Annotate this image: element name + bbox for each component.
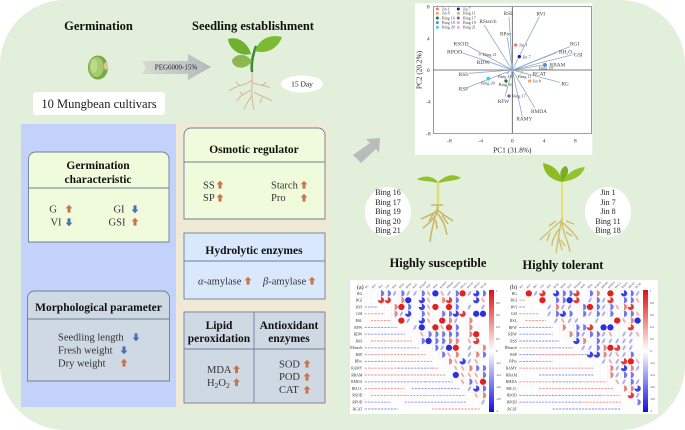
sample points: Bing 16 bbox=[499, 82, 513, 87]
sample points: Bing 21 bbox=[483, 52, 497, 57]
axes ticks: PC2 (20.2%) bbox=[415, 50, 424, 89]
card: Lipid peroxidation and Antioxidant enzymes: O bbox=[218, 378, 226, 389]
card: Lipid peroxidation and Antioxidant enzymes: MDA bbox=[207, 365, 232, 376]
card: Hydrolytic enzymes bbox=[184, 233, 325, 299]
chart: correlation matrix (b): 0.8 bbox=[650, 301, 654, 305]
axes ticks: 8 bbox=[427, 5, 430, 11]
card: Germination characteristic: G bbox=[49, 204, 57, 216]
vector labels: RH₂O₂ bbox=[559, 50, 574, 56]
card: Morphological parameter bbox=[28, 291, 170, 381]
vectors bbox=[461, 17, 572, 117]
callout: susceptible cultivars: Bing 17 bbox=[375, 198, 401, 207]
card: Lipid peroxidation and Antioxidant enzymes: 2 bbox=[226, 381, 230, 390]
card: Germination characteristic: VI bbox=[50, 218, 62, 228]
sample points: Jin 7 bbox=[522, 54, 531, 59]
card: Osmotic regulator: Starch bbox=[271, 180, 299, 192]
icon: susceptible seedling bbox=[418, 176, 460, 242]
card: Germination characteristic: GSI bbox=[109, 218, 126, 228]
legend: Jin 7 bbox=[463, 6, 471, 11]
card: Lipid peroxidation and Antioxidant enzymes: 2 bbox=[215, 381, 219, 390]
card: Osmotic regulator: Pro bbox=[271, 193, 286, 204]
chart: correlation matrix (b): 0.2 bbox=[650, 337, 654, 341]
vector labels: RSOD bbox=[453, 41, 468, 47]
vector labels: RDW bbox=[477, 60, 491, 66]
vector labels: RAMY bbox=[516, 117, 532, 123]
chart: correlation matrix (b) bbox=[505, 280, 658, 414]
axes ticks: -8 bbox=[447, 139, 452, 145]
chart: correlation matrix (a): 1 bbox=[496, 289, 498, 293]
sample points: Bing 17 bbox=[512, 94, 527, 99]
card: Lipid peroxidation and Antioxidant enzymes: CAT bbox=[279, 385, 299, 396]
sample points: Jin 8 bbox=[533, 79, 541, 84]
chart: correlation matrix (a): -0.2 bbox=[496, 361, 501, 365]
card: Lipid peroxidation and Antioxidant enzymes: SOD bbox=[279, 360, 300, 370]
panel: biochemical traits right column bbox=[176, 124, 330, 407]
label box: 10 Mungbean cultivars bbox=[33, 92, 165, 115]
heading: Germination: Germination bbox=[64, 19, 133, 33]
chart: correlation matrix (a): -0.8 bbox=[496, 397, 501, 401]
axes ticks bbox=[415, 5, 577, 154]
heading: Highly tolerant: Highly tolerant bbox=[523, 258, 604, 272]
chart: correlation matrix (a): -0.4 bbox=[496, 373, 501, 377]
panel: physiological traits left column bbox=[21, 124, 176, 407]
legend: Bing 21 bbox=[463, 25, 476, 30]
card: Germination characteristic: characteristic bbox=[64, 174, 132, 186]
card: Osmotic regulator: Osmotic regulator bbox=[209, 144, 299, 156]
vector labels: RCAT bbox=[533, 72, 547, 78]
legend: Bing 11 bbox=[463, 11, 476, 16]
callout: susceptible cultivars: Bing 21 bbox=[375, 226, 401, 235]
legend: Jin 1 bbox=[442, 6, 450, 11]
card: Lipid peroxidation and Antioxidant enzymes: POD bbox=[279, 372, 300, 383]
vector labels: RVI bbox=[536, 11, 545, 17]
arrow: PEG6000-15% bbox=[142, 54, 211, 80]
axes ticks: 4 bbox=[427, 36, 430, 42]
label box: 10 Mungbean cultivars: 10 Mungbean cultivars bbox=[41, 97, 157, 111]
legend: Bing 16 bbox=[442, 15, 455, 20]
card: Hydrolytic enzymes: β-amylase bbox=[262, 276, 306, 288]
card: Lipid peroxidation and Antioxidant enzymes: peroxidation bbox=[188, 333, 251, 345]
callout: susceptible cultivars bbox=[365, 187, 411, 237]
axes ticks: PC1 (31.8%) bbox=[493, 145, 532, 154]
chart: correlation matrix (a): -1 bbox=[496, 409, 499, 413]
chart: correlation matrix (b): 1 bbox=[650, 289, 652, 293]
legend: Bing 17 bbox=[463, 15, 476, 20]
heading: Seedling establishment: Seedling establishment bbox=[192, 19, 315, 33]
card: Lipid peroxidation and Antioxidant enzymes bbox=[184, 312, 325, 403]
card: Morphological parameter: Fresh weight bbox=[58, 346, 113, 356]
sample points: Bing 11 bbox=[518, 74, 532, 79]
chart: correlation matrix (a) bbox=[350, 280, 507, 414]
card: Osmotic regulator: SP bbox=[203, 193, 215, 204]
vector labels: RBAM bbox=[550, 62, 566, 68]
arrow: PEG6000-15%: PEG6000-15% bbox=[155, 64, 197, 72]
vector labels: RStarch bbox=[479, 19, 497, 25]
sample points: Jin 1 bbox=[519, 43, 527, 48]
sample points: Bing 18 bbox=[539, 66, 553, 71]
callout: susceptible cultivars: Bing 19 bbox=[375, 207, 401, 216]
chart: correlation matrix (a): 0 bbox=[496, 349, 498, 353]
chart: correlation matrix (b): 0.6 bbox=[650, 313, 654, 317]
chart: correlation matrix (b): 0 bbox=[650, 349, 652, 353]
axes ticks: -4 bbox=[478, 139, 483, 145]
callout: 15 Day: 15 Day bbox=[291, 80, 313, 88]
chart: correlation matrix (b): -0.6 bbox=[650, 385, 655, 389]
chart: correlation matrix (a): 0.6 bbox=[496, 313, 500, 317]
chart: correlation matrix (a): -0.6 bbox=[496, 385, 501, 389]
card: Lipid peroxidation and Antioxidant enzymes: enzymes bbox=[268, 333, 310, 345]
axes ticks: 0 bbox=[427, 68, 430, 74]
vector labels: RSS bbox=[459, 72, 468, 78]
callout: tolerant cultivars: Jin 7 bbox=[600, 198, 616, 207]
vector labels: RMDA bbox=[531, 109, 547, 115]
chart: correlation matrix (a): 0.4 bbox=[496, 325, 500, 329]
callout: tolerant cultivars: Bing 18 bbox=[595, 226, 621, 235]
card: Hydrolytic enzymes: α-amylase bbox=[198, 276, 242, 288]
sample points bbox=[478, 43, 553, 99]
axes ticks: -8 bbox=[426, 131, 431, 137]
axes ticks: 8 bbox=[574, 139, 577, 145]
card: Germination characteristic: GI bbox=[113, 204, 125, 216]
vector labels: RPOD bbox=[447, 49, 462, 55]
callout: tolerant cultivars: Jin 8 bbox=[600, 207, 616, 216]
callout: 15 Day bbox=[281, 76, 323, 92]
card: Osmotic regulator: SS bbox=[203, 180, 215, 192]
chart: correlation matrix (b): 0.4 bbox=[650, 325, 654, 329]
arrow: to PCA results bbox=[353, 138, 380, 163]
heading: Highly susceptible: Highly susceptible bbox=[390, 256, 487, 270]
chart: correlation matrix (a): (a) bbox=[357, 284, 364, 291]
vector labels: RGI bbox=[570, 41, 579, 47]
callout: susceptible cultivars: Bing 16 bbox=[375, 188, 401, 197]
vector labels: RSP bbox=[459, 87, 468, 93]
callout: susceptible cultivars: Bing 20 bbox=[375, 217, 401, 226]
vector labels: GSI bbox=[574, 52, 583, 58]
callout: tolerant cultivars: Bing 11 bbox=[595, 217, 621, 226]
card: Hydrolytic enzymes: Hydrolytic enzymes bbox=[205, 245, 303, 257]
card: Morphological parameter: Dry weight bbox=[58, 358, 106, 370]
card: Lipid peroxidation and Antioxidant enzymes: H bbox=[207, 378, 215, 389]
legend: Bing 18 bbox=[442, 20, 455, 25]
legend: Jin 8 bbox=[442, 11, 450, 16]
card: Morphological parameter: Morphological parameter bbox=[35, 302, 162, 314]
chart: correlation matrix (a): 0.8 bbox=[496, 301, 500, 305]
card: Morphological parameter: Seedling length bbox=[58, 332, 124, 344]
chart: correlation matrix (b): -0.2 bbox=[650, 361, 655, 365]
sample points: Bing 19 bbox=[498, 74, 512, 79]
chart: correlation matrix (b): (b) bbox=[510, 284, 517, 291]
card: Osmotic regulator bbox=[184, 128, 325, 219]
axes ticks: 0 bbox=[511, 139, 514, 145]
legend bbox=[436, 6, 476, 30]
vector labels: RFW bbox=[498, 99, 510, 105]
card: Germination characteristic bbox=[28, 152, 169, 242]
icon: established seedling bbox=[228, 36, 282, 110]
vector labels: RG bbox=[561, 81, 569, 87]
chart: PCA biplot bbox=[415, 3, 592, 155]
chart: correlation matrix (b): -0.4 bbox=[650, 373, 655, 377]
callout: tolerant cultivars: Jin 1 bbox=[600, 188, 616, 197]
card: Lipid peroxidation and Antioxidant enzymes: Lipid bbox=[206, 320, 233, 332]
vector labels: RSL bbox=[504, 11, 513, 17]
sample points: Bing 20 bbox=[481, 80, 495, 85]
vector labels: RPro bbox=[500, 32, 511, 38]
callout: tolerant cultivars bbox=[585, 187, 631, 237]
legend: Bing 20 bbox=[442, 25, 455, 30]
icon: tolerant seedling bbox=[540, 163, 585, 253]
axes ticks: 4 bbox=[543, 139, 546, 145]
vector labels bbox=[447, 11, 583, 123]
axes ticks: -4 bbox=[426, 100, 431, 106]
chart: correlation matrix (b): -0.8 bbox=[650, 397, 655, 401]
legend: Bing 19 bbox=[463, 20, 476, 25]
card: Germination characteristic: Germination bbox=[66, 160, 130, 172]
icon: mungbean seed bbox=[88, 56, 108, 80]
chart: correlation matrix (a): 0.2 bbox=[496, 337, 500, 341]
chart: correlation matrix (b): -1 bbox=[650, 409, 653, 413]
card: Lipid peroxidation and Antioxidant enzymes: Antioxidant bbox=[260, 320, 319, 332]
